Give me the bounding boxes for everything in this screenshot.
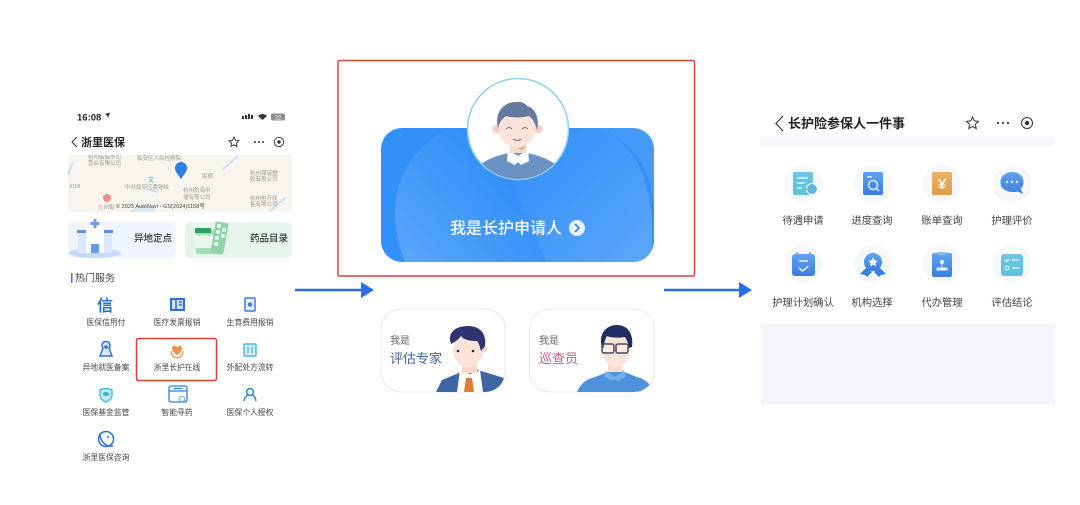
map: XI18 <box>69 184 80 190</box>
highlight: 浙里长护在线: 浙里长护在线 <box>154 362 201 372</box>
service: 医保个人授权 <box>227 389 274 417</box>
item: 评估结论 <box>991 245 1033 309</box>
item: 账单查询: ¥ <box>938 176 947 193</box>
icon: chevron button <box>569 220 585 236</box>
service: 智能寻药: 智能寻药 <box>161 407 193 417</box>
empty gray area <box>761 324 1055 405</box>
map <box>68 153 292 214</box>
service: 异地就医备案 <box>83 341 130 372</box>
figure: expert <box>436 326 504 392</box>
card: 评估专家: 我是 <box>390 335 410 347</box>
service: 浙里医保咨询 <box>83 432 130 462</box>
map: © 2025 AutoNavi - GS(2024)1158号 <box>116 203 205 210</box>
service: 浙里医保咨询: 浙里医保咨询 <box>83 452 130 462</box>
arrow: phone to applicant <box>295 282 374 298</box>
item: 评估结论: 评估结论 <box>991 296 1033 309</box>
map: 民宿 <box>202 172 214 180</box>
highlight: 浙里长护在线 <box>136 338 216 380</box>
item: 代办管理: 代办管理 <box>921 296 963 309</box>
map: 杭州电开线 <box>250 194 278 202</box>
service: 医保基金监管 <box>83 388 130 417</box>
header: 长护险参保人一件事 <box>788 116 905 131</box>
service: 医疗发票报销 <box>154 299 201 327</box>
item: 护理计划确认 <box>772 245 834 309</box>
highlight frame <box>338 60 694 276</box>
card: 异地定点 <box>68 219 176 258</box>
map: 杭州煤瑞塑 <box>250 169 278 177</box>
arrow: role to service page <box>664 282 752 298</box>
header: 浙里医保: 浙里医保 <box>81 135 125 149</box>
panel: phone home screen <box>68 112 292 462</box>
label: 我是长护申请人: 我是长护申请人 <box>450 220 562 238</box>
service: 医疗发票报销: 医疗发票报销 <box>154 317 201 327</box>
map: 速有限公司 <box>183 193 211 201</box>
card: 巡查员: 我是 <box>539 335 559 347</box>
card: 异地定点: 异地定点 <box>134 232 173 244</box>
item: 护理评价: 护理评价 <box>991 214 1033 227</box>
status bar <box>77 112 285 124</box>
service: 生育费用报销 <box>227 298 274 327</box>
map: 文 <box>148 176 154 184</box>
service: 医保基金监管: 医保基金监管 <box>83 407 130 417</box>
card: 巡查员: 巡查员 <box>539 351 578 366</box>
service: 异地就医备案: 异地就医备案 <box>83 362 130 372</box>
divider band <box>760 138 1055 146</box>
service: 外配处方流转: 外配处方流转 <box>227 362 274 372</box>
service: 生育费用报销: 生育费用报销 <box>227 317 274 327</box>
map: 营业有限公司 <box>88 159 121 167</box>
item: 账单查询: 账单查询 <box>921 214 963 227</box>
status bar: 22 <box>275 116 281 122</box>
map: 临安区人民检察院 <box>137 154 182 162</box>
map: 胶有限公司 <box>250 175 278 183</box>
item: 机构选择: 机构选择 <box>851 296 893 309</box>
icon grid <box>772 165 1033 309</box>
service: 外配处方流转 <box>227 344 274 372</box>
card: 药品目录 <box>185 221 292 258</box>
card: 评估专家 <box>381 309 505 392</box>
status bar: 16:08 <box>77 112 101 124</box>
card: 药品目录: 药品目录 <box>250 234 289 244</box>
service: 医保个人授权: 医保个人授权 <box>227 407 274 417</box>
item: 待遇申请: 待遇申请 <box>782 214 824 227</box>
service: 医保信用付: 信 <box>97 297 113 315</box>
heading: 热门服务: 热门服务 <box>75 272 115 284</box>
item: 代办管理 <box>921 245 963 309</box>
applicant card <box>381 78 654 262</box>
item: 待遇申请 <box>782 165 824 227</box>
service: 医保信用付 <box>87 297 126 327</box>
service: 智能寻药 <box>161 386 193 417</box>
item: 账单查询 <box>921 165 963 227</box>
map: 杭州临临市司 <box>88 153 121 161</box>
panel: role selection <box>338 60 694 392</box>
header: 浙里医保 <box>72 135 284 149</box>
panel: 长护险参保人一件事 <box>760 116 1055 405</box>
service: 医保信用付: 医保信用付 <box>87 317 126 327</box>
service grid <box>83 297 274 462</box>
card: 评估专家: 评估专家 <box>390 351 442 366</box>
item: 机构选择 <box>851 245 893 309</box>
avatar: elderly man <box>468 78 568 184</box>
header <box>776 116 1032 131</box>
map: 售有限公司 <box>250 200 278 208</box>
item: 进度查询: 进度查询 <box>851 214 893 227</box>
figure: inspector <box>577 325 654 392</box>
item: 进度查询 <box>851 165 893 227</box>
item: 护理评价 <box>991 165 1033 227</box>
map: 中共临安区委党校 <box>125 183 170 191</box>
map: 九州街 <box>98 203 115 211</box>
card: 巡查员 <box>530 309 654 392</box>
item: 护理计划确认: 护理计划确认 <box>772 296 834 309</box>
map: 杭州航海甲 <box>183 186 211 194</box>
